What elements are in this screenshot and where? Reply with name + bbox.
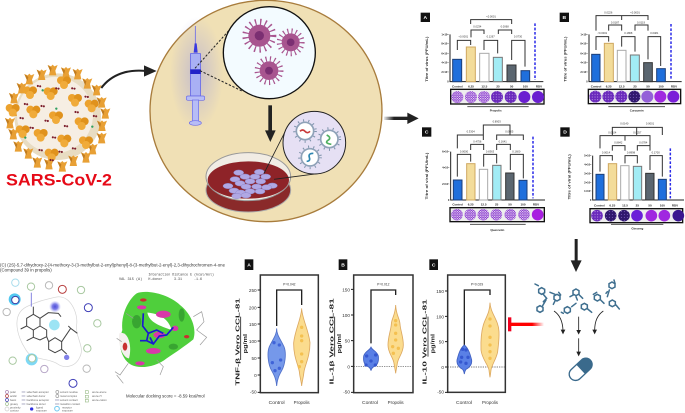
violin plot B: IL-1β: IL-1β Vero CCL-81 xyxy=(330,298,336,384)
chart D: ginseng: 100 xyxy=(660,204,665,208)
violin plot C: IL-10: 150 xyxy=(436,289,444,294)
panel: top antiviral bar charts A B xyxy=(421,11,682,112)
chart B: curcumin: RDV xyxy=(671,84,677,88)
icon: drug capsule xyxy=(567,356,595,383)
chart B: curcumin: 0.0187 xyxy=(611,20,620,24)
panel: virus inset xyxy=(283,111,346,174)
panel: cytokine violin plots xyxy=(236,259,505,406)
chart D: ginseng: 0 xyxy=(590,198,592,202)
chart D: ginseng: Control xyxy=(594,204,605,208)
chart A: propolis: Propolis xyxy=(490,108,502,112)
chart D: ginseng: 4×10⁵ xyxy=(584,163,592,167)
diagram legend: solvent contact xyxy=(60,398,78,402)
chart C: quercetin: 50 xyxy=(508,202,512,206)
chart D: ginseng: 0.8842 xyxy=(614,141,623,145)
chart D: ginseng: 2×10⁵ xyxy=(584,180,592,184)
chart B: curcumin: 6.25 xyxy=(606,84,612,88)
chart C: quercetin: 0.1600 xyxy=(512,149,521,153)
chart C: quercetin: 2×10⁵ xyxy=(442,182,450,186)
violin plot C: IL-10: IL-10 Vero CCL-81 xyxy=(423,299,429,384)
inhibition arrow xyxy=(508,317,544,331)
chart C: quercetin xyxy=(422,119,545,232)
chart A: propolis: 0.1267 xyxy=(487,34,495,38)
chart A: propolis: 12.5 xyxy=(481,84,488,88)
violin plot A: TNF: TNF-β Vero CCL-81 xyxy=(236,298,242,386)
chart A: propolis: A xyxy=(424,15,428,21)
chart C: quercetin: Quercetin xyxy=(490,228,504,232)
interaction table: H-donor xyxy=(148,277,162,281)
violin plot A: TNF: P=0.042 xyxy=(283,282,295,286)
violin plot A: TNF: pg/ml xyxy=(243,333,249,353)
chart D: ginseng: 0.1700 xyxy=(652,150,660,154)
compound title: (C) (2S)-5,7-dihydroxy-2-[4-methoxy-3-(3-methylbut-2-enyl)phenyl]-8-(3-methylbut-2-enyl)-2,3-dihydrochromen-4-one xyxy=(0,262,226,267)
chart C: quercetin: 0.8903 xyxy=(493,119,501,123)
violin plot C: IL-10: P=0.029 xyxy=(471,282,483,286)
panel: lower antiviral bar charts C D xyxy=(422,119,684,232)
violin plot B: IL-1β: pg/ml xyxy=(337,333,343,353)
chart D: ginseng: 0.0014 xyxy=(602,150,611,154)
icon: compound molecules xyxy=(535,280,619,313)
chart C: quercetin: 0.0000 xyxy=(460,149,469,153)
diagram legend: backbone donor xyxy=(27,402,46,406)
violin plot C: IL-10 xyxy=(423,259,505,406)
panel: experimental workflow circle xyxy=(150,0,382,222)
chart B: curcumin: 0 xyxy=(586,80,588,84)
chart B: curcumin xyxy=(560,11,682,112)
chart A: propolis: <0.0001 xyxy=(486,14,496,18)
chart B: curcumin: 50 xyxy=(646,84,650,88)
interaction table: Interaction Distance E (kcal/mol) xyxy=(148,272,214,276)
chart C: quercetin: 0.4756 xyxy=(473,139,482,143)
violin plot A: TNF: Control xyxy=(269,400,285,406)
arrow: workflow to charts xyxy=(384,113,419,124)
chart D: ginseng: 25 xyxy=(636,204,639,208)
violin plot B: IL-1β: Control xyxy=(362,400,378,406)
chart D: ginseng: 0.0257 xyxy=(633,131,642,135)
violin plot B: IL-1β: B xyxy=(341,263,345,269)
violin plot A: TNF: -50 xyxy=(250,390,257,395)
violin plot C: IL-10: pg/ml xyxy=(430,333,436,353)
arrows: compounds converge xyxy=(554,311,603,356)
chart A: propolis: 8×10⁴ xyxy=(441,42,449,46)
violin plot C: IL-10: 0 xyxy=(441,365,444,370)
diagram legend: ligand xyxy=(36,405,44,409)
chart A: propolis: <0.0001 xyxy=(458,34,469,38)
chart A: propolis: 4×10⁴ xyxy=(441,61,449,65)
chart B: curcumin: 8×10⁴ xyxy=(580,42,588,46)
chart A: propolis: 50 xyxy=(510,84,514,88)
diagram legend: proximity xyxy=(10,405,21,409)
violin plot A: TNF: 0 xyxy=(254,373,257,378)
chart B: curcumin: Titre of virus (PFU/mL) xyxy=(564,36,568,82)
diagram legend: solvent residue xyxy=(60,390,78,394)
violin plot B: IL-1β: 50 xyxy=(345,339,350,344)
interaction table: -1.6 xyxy=(194,277,202,281)
diagram legend: exposure xyxy=(62,408,73,412)
diagram legend: polar xyxy=(10,390,16,394)
diagram legend: contour xyxy=(10,408,19,412)
chart B: curcumin: 0.0119 xyxy=(637,20,645,24)
chart C: quercetin: 4×10⁵ xyxy=(442,166,450,170)
violin plot A: TNF: 50 xyxy=(251,356,257,361)
panel: infected cells inset xyxy=(223,7,315,99)
icon: SARS-CoV-2 virus particle xyxy=(5,65,110,172)
chart B: curcumin: 2×10⁴ xyxy=(580,70,588,74)
chart D: ginseng: D xyxy=(563,130,567,136)
diagram legend: receptor xyxy=(62,405,72,409)
violin plot C: IL-10: 50 xyxy=(439,340,444,345)
chart C: quercetin: C xyxy=(425,130,429,136)
chart C: quercetin: 100 xyxy=(521,202,526,206)
chart D: ginseng: 50 xyxy=(648,204,652,208)
icon: syringe xyxy=(170,17,223,130)
chart A: propolis: Titre of virus (PFU/mL) xyxy=(425,36,429,82)
compound title xyxy=(0,262,226,273)
diagram legend: metal complex xyxy=(60,394,78,398)
chart D: ginseng: 1×10⁵ xyxy=(584,189,592,193)
violin plot C: IL-10: -50 xyxy=(437,390,444,395)
chart B: curcumin: <0.0001 xyxy=(597,31,608,35)
chart C: quercetin: Titre of viral (PFU/mL) xyxy=(425,152,429,199)
chart C: quercetin: Control xyxy=(452,202,463,206)
diagram legend: arene-arene xyxy=(92,390,107,394)
chart D: ginseng: 12.5 xyxy=(622,204,628,208)
chart D: ginseng: RDV xyxy=(672,204,678,208)
chart A: propolis: Control xyxy=(452,84,463,88)
violin plot B: IL-1β: 150 xyxy=(342,287,350,292)
chart B: curcumin: 100 xyxy=(659,84,664,88)
callout lines: syringe to cells xyxy=(195,30,243,91)
heading: SARS-CoV-2: SARS-CoV-2 xyxy=(6,171,112,190)
chart A: propolis: 0.0730 xyxy=(514,34,523,38)
violin plot C: IL-10: C xyxy=(432,263,436,269)
diagram legend xyxy=(5,390,107,412)
violin plot A: TNF: A xyxy=(247,263,251,269)
chart C: quercetin: 0.0005 xyxy=(505,130,514,134)
chart C: quercetin: 6.25 xyxy=(468,202,474,206)
chart B: curcumin: 0.0481 xyxy=(650,31,659,35)
docking score caption: Molecular docking score = -8.59 kcal/mol xyxy=(126,394,205,399)
violin plot A: TNF: 100 xyxy=(249,339,257,344)
chart A: propolis: 25 xyxy=(496,84,500,88)
chart A: propolis: 6×10⁴ xyxy=(441,51,449,55)
violin plot C: IL-10: Control xyxy=(456,400,472,406)
violin plot A: TNF: 200 xyxy=(249,305,257,310)
icon: petri dish with plaques xyxy=(206,153,291,212)
chart B: curcumin: 1×10⁵ xyxy=(580,32,588,36)
chart D: ginseng: 0.0140 xyxy=(620,122,629,126)
chart C: quercetin: 0.8363 xyxy=(486,149,495,153)
chart B: curcumin: 0.0226 xyxy=(604,11,613,15)
violin plot B: IL-1β: 0 xyxy=(347,364,350,369)
chart A: propolis xyxy=(421,13,544,112)
chart B: curcumin: B xyxy=(563,15,567,21)
chart B: curcumin: 6×10⁴ xyxy=(580,51,588,55)
interaction table: VAL 315 (A) xyxy=(119,277,142,281)
chart D: ginseng: 6.25 xyxy=(609,204,616,208)
diagram legend: sidechain donor xyxy=(27,394,46,398)
chart C: quercetin: 0 xyxy=(448,198,450,202)
chart C: quercetin: 0.3304 xyxy=(467,130,475,134)
chart C: quercetin: RDV xyxy=(533,202,539,206)
chart D: ginseng: Titre of viral (PFU/mL) xyxy=(568,153,572,199)
violin plot A: TNF: 250 xyxy=(249,288,257,293)
chart D: ginseng xyxy=(560,122,684,231)
chart D: ginseng: Ginseng xyxy=(631,227,643,231)
panel: compound to drug xyxy=(508,239,619,383)
chart B: curcumin: Curcumin xyxy=(630,108,644,112)
diagram legend: sidechain acceptor xyxy=(27,390,49,394)
chart D: ginseng: 0.8998 xyxy=(627,150,636,154)
violin plot B: IL-1β xyxy=(330,259,413,406)
chart C: quercetin: 12.5 xyxy=(481,202,487,206)
chart B: curcumin: 0.1868 xyxy=(624,31,633,35)
chart B: curcumin: <0.0001 xyxy=(630,11,640,15)
chart D: ginseng: 0.0001 xyxy=(646,122,655,126)
chart A: propolis: RDV xyxy=(536,84,542,88)
chart A: propolis: 0 xyxy=(447,80,449,84)
violin plot B: IL-1β: 100 xyxy=(342,313,350,318)
chart D: ginseng: 0.0784 xyxy=(639,141,648,145)
chart C: quercetin: 0.1641 xyxy=(499,139,507,143)
chart A: propolis: 6.25 xyxy=(468,84,474,88)
chart A: propolis: 2×10⁴ xyxy=(441,70,449,74)
violin plot A: TNF xyxy=(236,259,318,406)
violin plot A: TNF: 150 xyxy=(249,322,257,327)
diagram legend: greasy xyxy=(10,402,19,406)
diagram legend: exposure xyxy=(36,408,47,412)
interaction table: 3.31 xyxy=(174,277,182,281)
chart D: ginseng: 3×10⁵ xyxy=(584,171,592,175)
2D interaction diagram xyxy=(3,279,101,387)
chart B: curcumin: 4×10⁴ xyxy=(580,61,588,65)
chart A: propolis: 100 xyxy=(523,84,528,88)
chart D: ginseng: 5×10⁵ xyxy=(584,154,592,158)
diagram legend: basic xyxy=(10,398,17,402)
violin plot B: IL-1β: Propolis xyxy=(388,400,404,406)
diagram legend: metal/ion contact xyxy=(60,402,80,406)
arrow: charts down to compounds xyxy=(571,239,582,272)
violin plot B: IL-1β: -50 xyxy=(343,390,350,395)
section: infection workflow xyxy=(5,0,419,222)
violin plot C: IL-10: Propolis xyxy=(482,400,498,406)
chart B: curcumin: Control xyxy=(591,84,601,88)
diagram legend: acidic xyxy=(10,394,17,398)
panel: molecular docking xyxy=(0,262,226,412)
callout lines: dish to virus inset xyxy=(264,130,320,179)
arrow: cells to dish xyxy=(265,105,276,142)
chart B: curcumin: 25 xyxy=(633,84,637,88)
3D docking surface xyxy=(115,292,207,383)
chart B: curcumin: 12.5 xyxy=(619,84,625,88)
chart D: ginseng: 0.0104 xyxy=(608,131,617,135)
compound title: (Compound 39 in propolis) xyxy=(0,268,52,273)
chart A: propolis: 0.0234 xyxy=(473,24,482,28)
chart A: propolis: 1×10⁵ xyxy=(441,32,449,36)
diagram legend: arene-cation xyxy=(92,398,107,402)
chart C: quercetin: 25 xyxy=(495,202,499,206)
diagram legend: arene-H xyxy=(92,394,102,398)
arrow: virus to workflow xyxy=(101,65,157,88)
violin plot B: IL-1β: P=0.012 xyxy=(377,282,389,286)
violin plot C: IL-10: 100 xyxy=(436,314,444,319)
violin plot A: TNF: Propolis xyxy=(294,400,310,406)
chart C: quercetin: 6×10⁵ xyxy=(442,150,450,154)
interaction table xyxy=(119,272,214,281)
chart A: propolis: 0.0068 xyxy=(501,24,509,28)
diagram legend: backbone acceptor xyxy=(27,398,49,402)
